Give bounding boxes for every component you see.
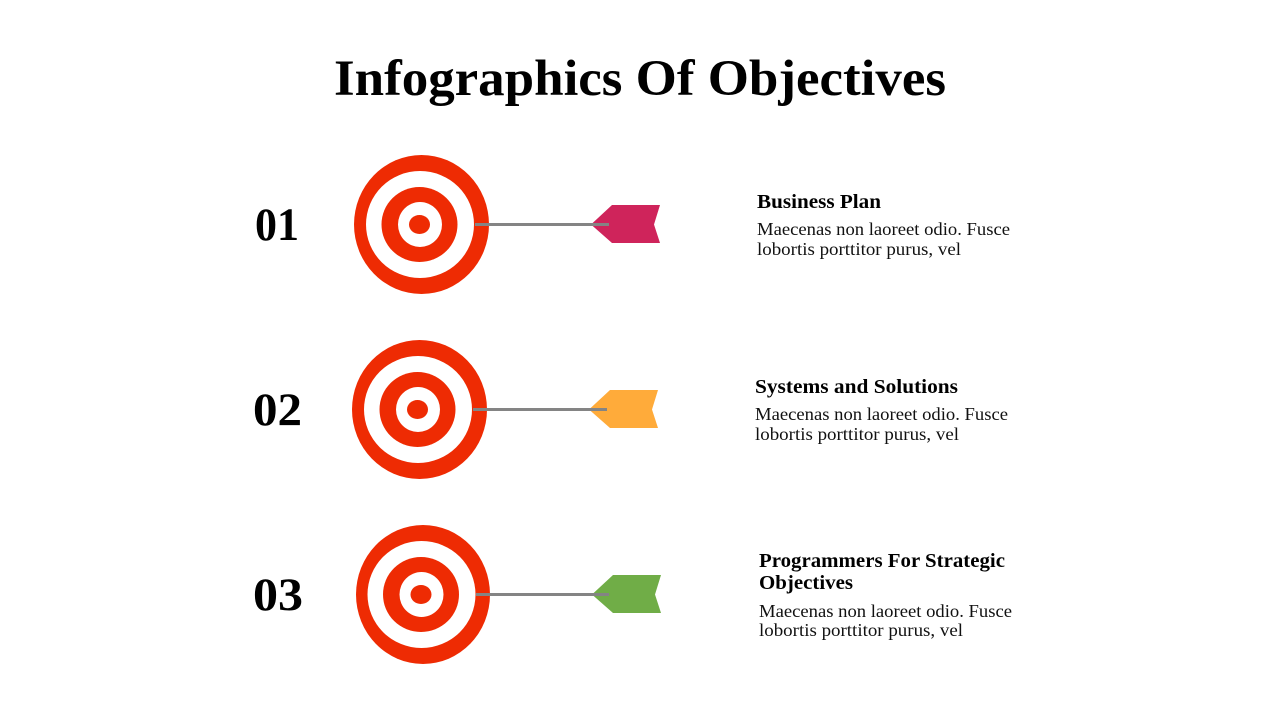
- text block 2: Systems and Solutions: [755, 376, 958, 398]
- text block 2: Maecenas non laoreet odio. Fusce: [755, 404, 1008, 424]
- arrow 3: [476, 575, 661, 613]
- icon: target 2: [352, 340, 487, 479]
- number 02: 02: [253, 384, 302, 436]
- arrow 1: [475, 205, 660, 243]
- text block 1: Business Plan: [757, 191, 881, 213]
- text block 3: lobortis porttitor purus, vel: [759, 620, 963, 640]
- row 1: business plan: [255, 155, 1010, 294]
- number 01: 01: [255, 199, 299, 251]
- text block 1: Maecenas non laoreet odio. Fusce: [757, 219, 1010, 239]
- title: Infographics Of Objectives: [334, 51, 946, 107]
- text block 2: lobortis porttitor purus, vel: [755, 424, 959, 444]
- number 03: 03: [253, 569, 303, 621]
- text block 1: lobortis porttitor purus, vel: [757, 239, 961, 259]
- text block 3: [759, 550, 1012, 640]
- text block 1: [757, 191, 1010, 259]
- text block 3: Programmers For Strategic: [759, 550, 1005, 572]
- text block 2: [755, 376, 1008, 444]
- text block 3: Maecenas non laoreet odio. Fusce: [759, 601, 1012, 621]
- icon: target 1: [354, 155, 489, 294]
- text block 3: Objectives: [759, 572, 853, 594]
- row 3: programmers for strategic objectives: [253, 525, 1012, 664]
- row 2: systems and solutions: [253, 340, 1008, 479]
- arrow 2: [473, 390, 658, 428]
- icon: target 3: [356, 525, 490, 664]
